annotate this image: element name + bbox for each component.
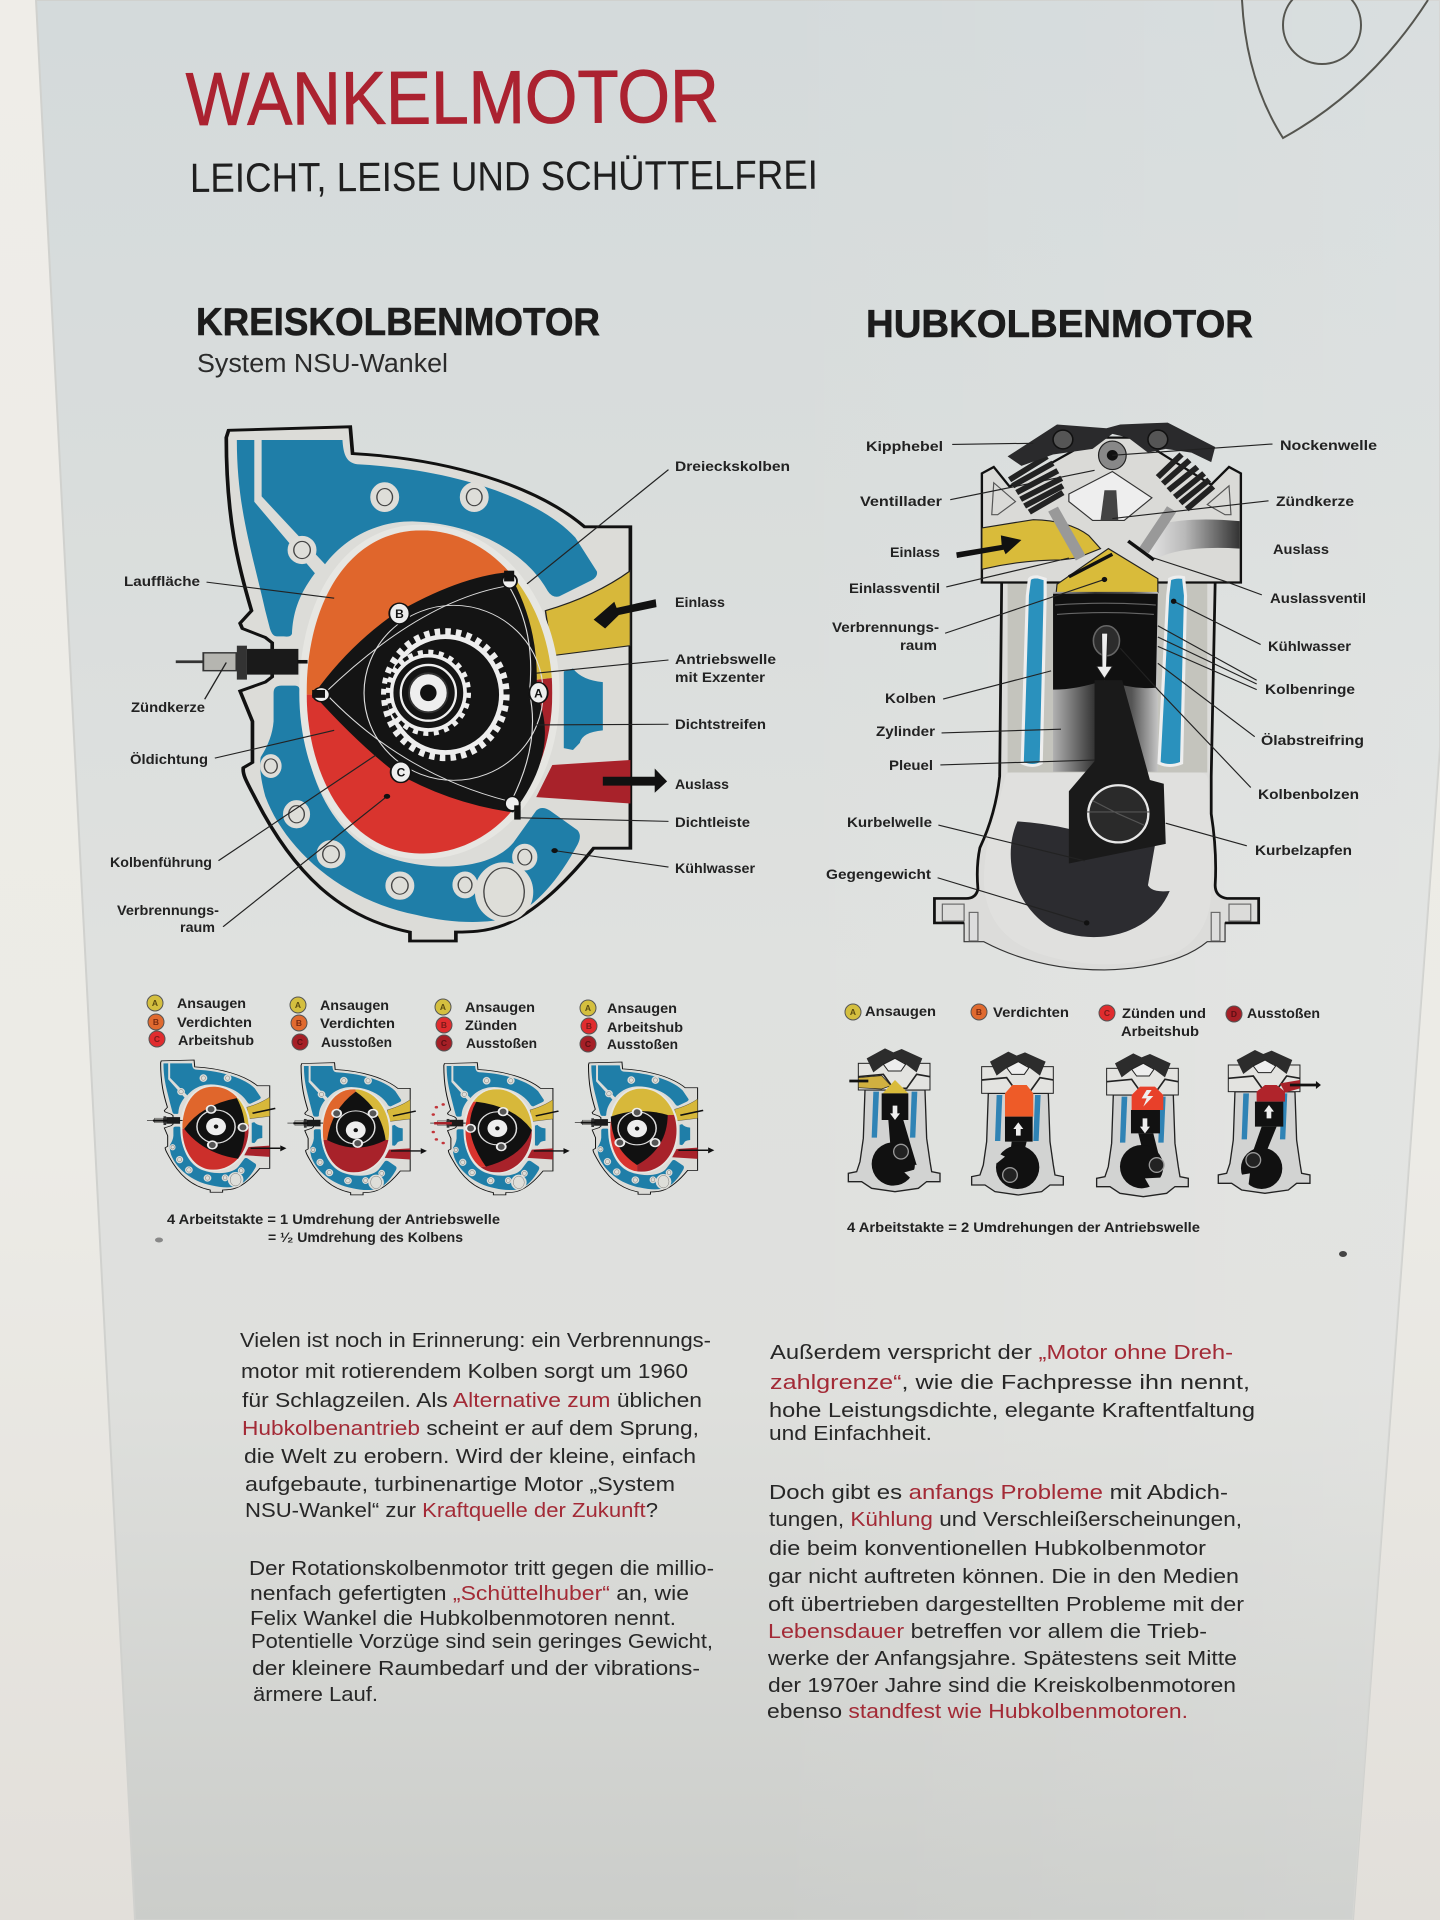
rotary engine labels: Verbrennungs- <box>117 902 219 918</box>
rotary cycle note <box>167 1211 500 1245</box>
piston stroke legend: A <box>850 1007 856 1017</box>
piston stroke legend: Ansaugen <box>865 1003 936 1019</box>
text column right: zahlgrenze“ , wie die Fachpresse ihn nennt, <box>770 1371 1250 1394</box>
piston engine labels: Ventillader <box>860 493 943 509</box>
small rotary diagram 4 <box>575 1062 714 1194</box>
piston engine labels: Zündkerze <box>1276 493 1354 509</box>
rotary engine labels: Einlass <box>675 594 725 610</box>
piston engine labels: Einlass <box>890 544 940 560</box>
rotary engine labels: Zündkerze <box>131 699 205 715</box>
rotary stroke legends: Ausstoßen <box>321 1034 392 1050</box>
rotary stroke legends: Ansaugen <box>320 997 389 1013</box>
rotary engine labels: Lauffläche <box>124 573 200 589</box>
text column right: werke der Anfangsjahre. Spätestens seit Mitte <box>767 1647 1237 1670</box>
text column left: motor mit rotierendem Kolben sorgt um 1960 <box>241 1360 688 1383</box>
small piston diagram 4 <box>1218 1050 1321 1193</box>
rotary stroke legends: A <box>295 1000 301 1010</box>
text column right: hohe Leistungsdichte, elegante Kraftentfaltung <box>769 1399 1255 1422</box>
rotary engine labels <box>110 458 790 935</box>
piston engine labels: Auslass <box>1273 541 1329 557</box>
rotary stroke legends: C <box>585 1039 591 1049</box>
rotary stroke legends: Zünden <box>465 1017 517 1033</box>
text column left: Vielen ist noch in Erinnerung: ein Verbrennungs- <box>240 1329 711 1352</box>
subtitle: LEICHT, LEISE UND SCHÜTTELFREI <box>190 152 818 201</box>
rotary cycle note: 4 Arbeitstakte = 1 Umdrehung der Antriebswelle <box>167 1211 500 1227</box>
piston stroke legend: Zünden und <box>1122 1005 1206 1021</box>
piston engine labels: Einlassventil <box>849 580 940 596</box>
rotary engine labels: Öldichtung <box>130 751 208 767</box>
text column right: gar nicht auftreten können. Die in den Medien <box>768 1565 1239 1588</box>
text column right: oft übertrieben dargestellten Probleme mit der <box>768 1593 1244 1616</box>
piston engine diagram <box>934 423 1273 970</box>
text column left <box>240 1329 714 1706</box>
piston stroke legend: C <box>1104 1008 1110 1018</box>
piston engine labels: Ölabstreifring <box>1261 732 1364 748</box>
corner rotor emblem <box>1242 0 1428 138</box>
piston engine labels: Pleuel <box>889 757 933 773</box>
rotor chamber letters: A <box>534 686 543 700</box>
text column right: die beim konventionellen Hubkolbenmotor <box>769 1537 1206 1560</box>
rotary engine labels: Kühlwasser <box>675 860 756 876</box>
piston engine labels: Auslassventil <box>1270 590 1366 606</box>
piston stroke legend: B <box>976 1007 982 1017</box>
small dot mark <box>1339 1251 1347 1257</box>
rotor chamber letters: B <box>395 607 404 621</box>
piston engine labels: Kolbenringe <box>1265 681 1355 697</box>
title: WANKELMOTOR <box>186 54 719 141</box>
piston cycle note: 4 Arbeitstakte = 2 Umdrehungen der Antriebswelle <box>847 1219 1200 1235</box>
small rotary diagram 2 <box>287 1063 427 1195</box>
small rotary diagram 3 <box>430 1063 570 1195</box>
rotary stroke legends: B <box>296 1018 302 1028</box>
rotary engine labels: mit Exzenter <box>675 669 766 685</box>
text column right: der 1970er Jahre sind die Kreiskolbenmotoren <box>768 1674 1236 1697</box>
text column left: aufgebaute, turbinenartige Motor „System <box>245 1473 675 1496</box>
small rotary diagram 1 <box>147 1060 286 1192</box>
rotary stroke legends: B <box>441 1020 447 1030</box>
rotary stroke legends: B <box>586 1021 592 1031</box>
rotary engine labels: Kolbenführung <box>110 854 212 870</box>
small print mark <box>155 1238 163 1242</box>
text column left: Potentielle Vorzüge sind sein geringes Gewicht, <box>251 1630 713 1653</box>
piston engine labels: Kipphebel <box>866 438 943 454</box>
rotary stroke legends <box>147 995 683 1052</box>
rotary engine labels: Auslass <box>675 776 729 792</box>
rotary engine labels: Dichtleiste <box>675 814 750 830</box>
piston engine labels: Kurbelwelle <box>847 814 932 830</box>
rotary engine labels: Dichtstreifen <box>675 716 766 732</box>
rotary stroke legends: Ansaugen <box>607 1000 677 1016</box>
text column right: und Einfachheit. <box>769 1422 932 1445</box>
piston engine labels: Kolben <box>885 690 936 706</box>
text column left: nenfach gefertigten „Schüttelhuber“ an, wie <box>250 1582 689 1605</box>
rotary stroke legends: Arbeitshub <box>178 1032 254 1048</box>
piston stroke legend: Arbeitshub <box>1121 1023 1199 1039</box>
rotary engine labels: Antriebswelle <box>675 651 776 667</box>
rotary stroke legends: Ausstoßen <box>466 1035 537 1051</box>
piston engine labels: Zylinder <box>876 723 936 739</box>
text column left: die Welt zu erobern. Wird der kleine, einfach <box>244 1445 696 1468</box>
small piston diagram 1 <box>848 1048 940 1192</box>
piston engine labels: Nockenwelle <box>1280 437 1377 453</box>
rotary stroke legends: Verdichten <box>177 1014 252 1030</box>
rotary engine diagram <box>176 427 668 941</box>
rotary stroke legends: Ansaugen <box>465 999 535 1015</box>
piston engine labels: Kühlwasser <box>1268 638 1352 654</box>
piston engine labels <box>826 437 1377 882</box>
rotary stroke legends: Ansaugen <box>177 995 246 1011</box>
rotary stroke legends: Ausstoßen <box>607 1036 678 1052</box>
text column left: für Schlagzeilen. Als Alternative zum üblichen <box>242 1389 702 1412</box>
piston engine labels: raum <box>900 637 937 653</box>
heading: Hubkolbenmotor: HUBKOLBENMOTOR <box>866 303 1253 346</box>
text column left: Hubkolbenantrieb scheint er auf dem Sprung, <box>242 1417 699 1440</box>
text column left: ärmere Lauf. <box>253 1683 378 1706</box>
text column left: NSU-Wankel“ zur Kraftquelle der Zukunft ? <box>245 1499 658 1522</box>
text column left: Felix Wankel die Hubkolbenmotoren nennt. <box>250 1607 676 1630</box>
rotary stroke legends: A <box>152 998 158 1008</box>
piston engine labels: Kurbelzapfen <box>1255 842 1352 858</box>
piston engine labels: Verbrennungs- <box>832 619 939 635</box>
text column right: Doch gibt es anfangs Probleme mit Abdich- <box>769 1481 1228 1504</box>
rotary stroke legends: Arbeitshub <box>607 1019 683 1035</box>
text column right: Außerdem verspricht der „Motor ohne Dreh- <box>770 1341 1233 1364</box>
rotary stroke legends: C <box>441 1038 447 1048</box>
rotary cycle note: = ¹⁄₂ Umdrehung des Kolbens <box>268 1229 463 1245</box>
subheading: System NSU-Wankel: System NSU-Wankel <box>197 350 448 378</box>
rotary stroke legends: Verdichten <box>320 1015 395 1031</box>
heading: Kreiskolbenmotor: KREISKOLBENMOTOR <box>196 301 600 344</box>
rotary stroke legends: A <box>440 1002 446 1012</box>
rotary stroke legends: C <box>154 1034 160 1044</box>
text column right: ebenso standfest wie Hubkolbenmotoren. <box>767 1700 1188 1723</box>
piston stroke legend: D <box>1231 1009 1237 1019</box>
text column left: der kleinere Raumbedarf und der vibrations- <box>252 1657 700 1680</box>
rotor chamber letters <box>395 607 543 780</box>
rotary engine labels: raum <box>180 919 215 935</box>
rotary stroke legends: C <box>297 1037 303 1047</box>
text column left: Der Rotationskolbenmotor tritt gegen die millio- <box>249 1557 714 1580</box>
text column right: tungen, Kühlung und Verschleißerscheinungen, <box>769 1508 1242 1531</box>
rotary engine labels: Dreieckskolben <box>675 458 790 474</box>
text column right <box>767 1341 1255 1723</box>
piston stroke legend <box>845 1003 1320 1039</box>
piston stroke legend: Ausstoßen <box>1247 1005 1320 1021</box>
piston engine labels: Gegengewicht <box>826 866 931 882</box>
rotor chamber letters: C <box>397 766 406 780</box>
text column right: Lebensdauer betreffen vor allem die Trieb- <box>768 1620 1207 1643</box>
piston engine labels: Kolbenbolzen <box>1258 786 1359 802</box>
small piston diagram 3 <box>1097 1053 1188 1197</box>
piston stroke legend: Verdichten <box>993 1004 1069 1020</box>
rotary stroke legends: B <box>153 1017 159 1027</box>
small piston diagram 2 <box>972 1052 1063 1195</box>
rotary stroke legends: A <box>585 1003 591 1013</box>
